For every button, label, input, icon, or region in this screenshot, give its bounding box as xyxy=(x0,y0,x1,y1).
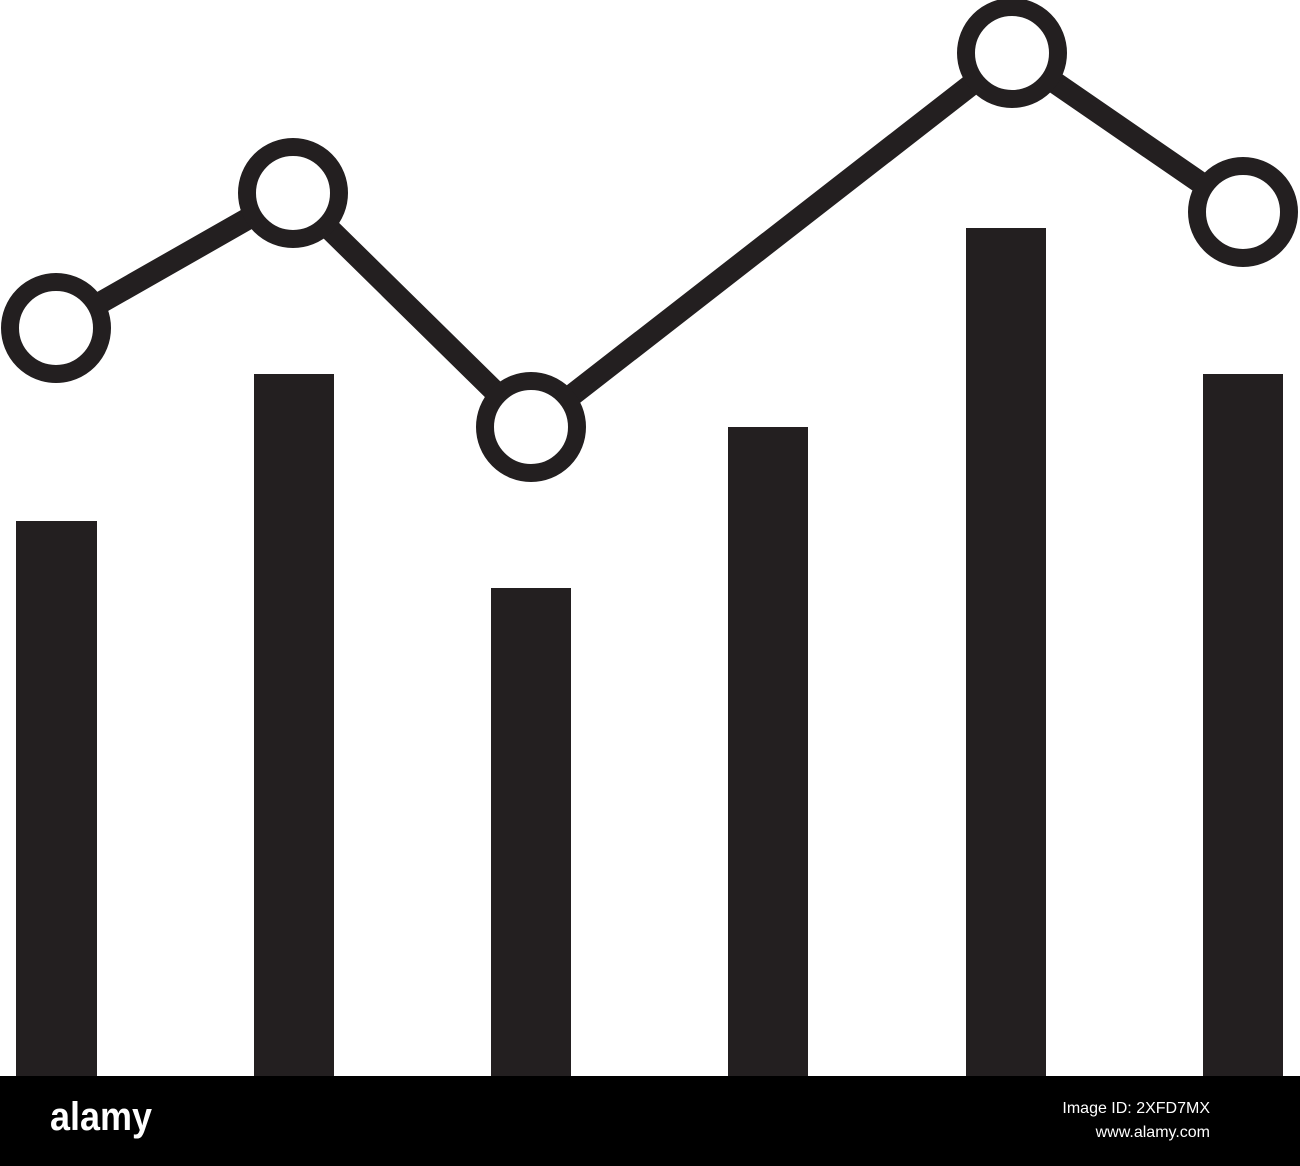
footer watermark bar: www.alamy.com xyxy=(1095,1124,1210,1141)
footer watermark bar: alamy xyxy=(50,1095,153,1139)
footer watermark bar xyxy=(0,1076,1300,1166)
trend line xyxy=(10,7,1289,473)
footer watermark bar: Image ID: 2XFD7MX xyxy=(1062,1100,1210,1117)
bars xyxy=(16,228,1283,1077)
